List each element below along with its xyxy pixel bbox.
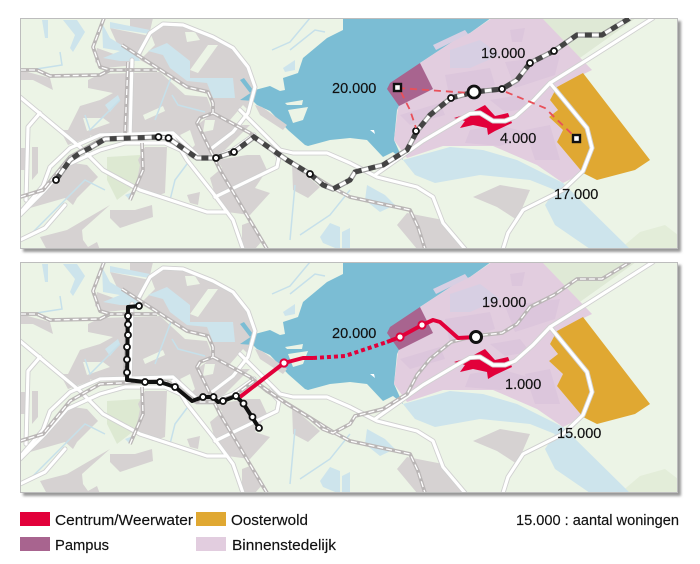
legend item: Binnenstedelijk [196,537,337,554]
terminus marker [470,332,482,342]
panel: lower map, proposed metro extension [20,262,681,496]
number labels upper map: 19.000 [481,46,525,62]
legend item: Centrum/Weerwater: Centrum/Weerwater [55,513,193,529]
metro stations [124,303,426,431]
square station markers [394,84,580,142]
number labels upper map: 4.000 [500,131,536,147]
rail line with stations [53,18,630,189]
number labels lower map: 1.000 [505,377,541,393]
legend item: Oosterwold [196,512,308,529]
legend item: Pampus: Pampus [55,538,109,554]
red metro extension [240,320,476,397]
number labels lower map: 20.000 [332,326,376,342]
legend item: Binnenstedelijk: Binnenstedelijk [232,538,337,554]
number labels upper map: 17.000 [554,187,598,203]
number labels upper map [332,46,598,203]
legend [20,512,679,554]
legend note: aantal woningen: 15.000 : aantal woningen [516,513,679,529]
number labels upper map: 20.000 [332,81,376,97]
panel: upper map, current rail line [20,18,681,252]
legend item: Oosterwold: Oosterwold [231,513,308,529]
central station marker [468,86,480,98]
number labels lower map [332,295,601,442]
existing black metro line [127,306,259,428]
number labels lower map: 15.000 [557,426,601,442]
dashed red connection lines [398,88,577,139]
number labels lower map: 19.000 [482,295,526,311]
legend item: Pampus [20,537,109,554]
